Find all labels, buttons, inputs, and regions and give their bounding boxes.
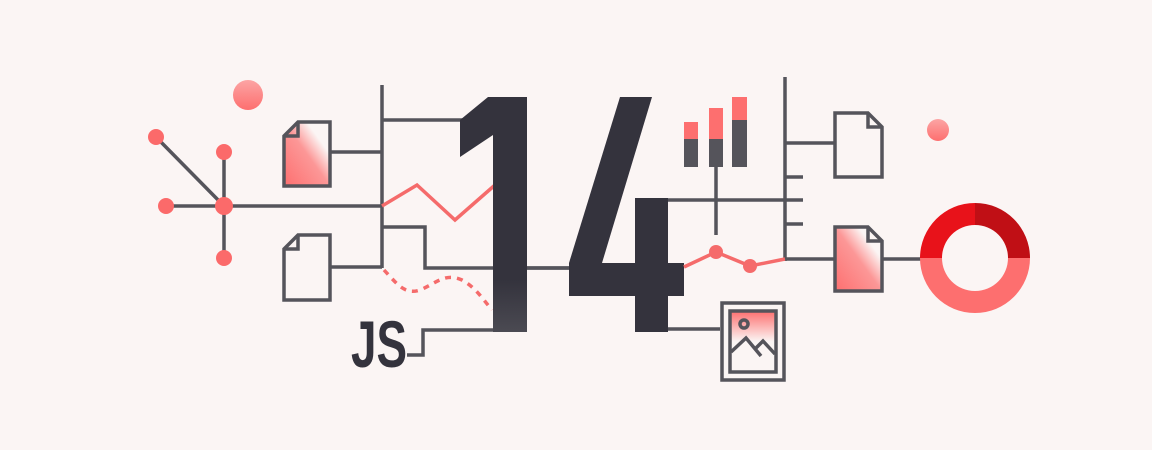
numeral 4 <box>569 97 684 332</box>
network graph <box>148 129 382 266</box>
document icon 2 <box>284 235 330 300</box>
document icon 1 <box>284 122 330 186</box>
dashed curve <box>384 270 492 310</box>
red line chart <box>684 245 785 273</box>
red zigzag line <box>382 185 495 220</box>
right connector lines <box>668 77 922 329</box>
numeral 1 <box>460 97 527 332</box>
donut chart <box>920 203 1030 313</box>
image icon <box>722 303 784 380</box>
JS label: JS <box>351 307 407 381</box>
decorative dot: right <box>927 119 949 141</box>
decorative dot: top-left <box>233 80 263 110</box>
line 1 to 4 <box>527 266 570 270</box>
document icon 4 <box>835 227 882 291</box>
bar chart <box>684 97 747 235</box>
left connector lines <box>330 85 575 355</box>
document icon 3 <box>835 113 882 177</box>
